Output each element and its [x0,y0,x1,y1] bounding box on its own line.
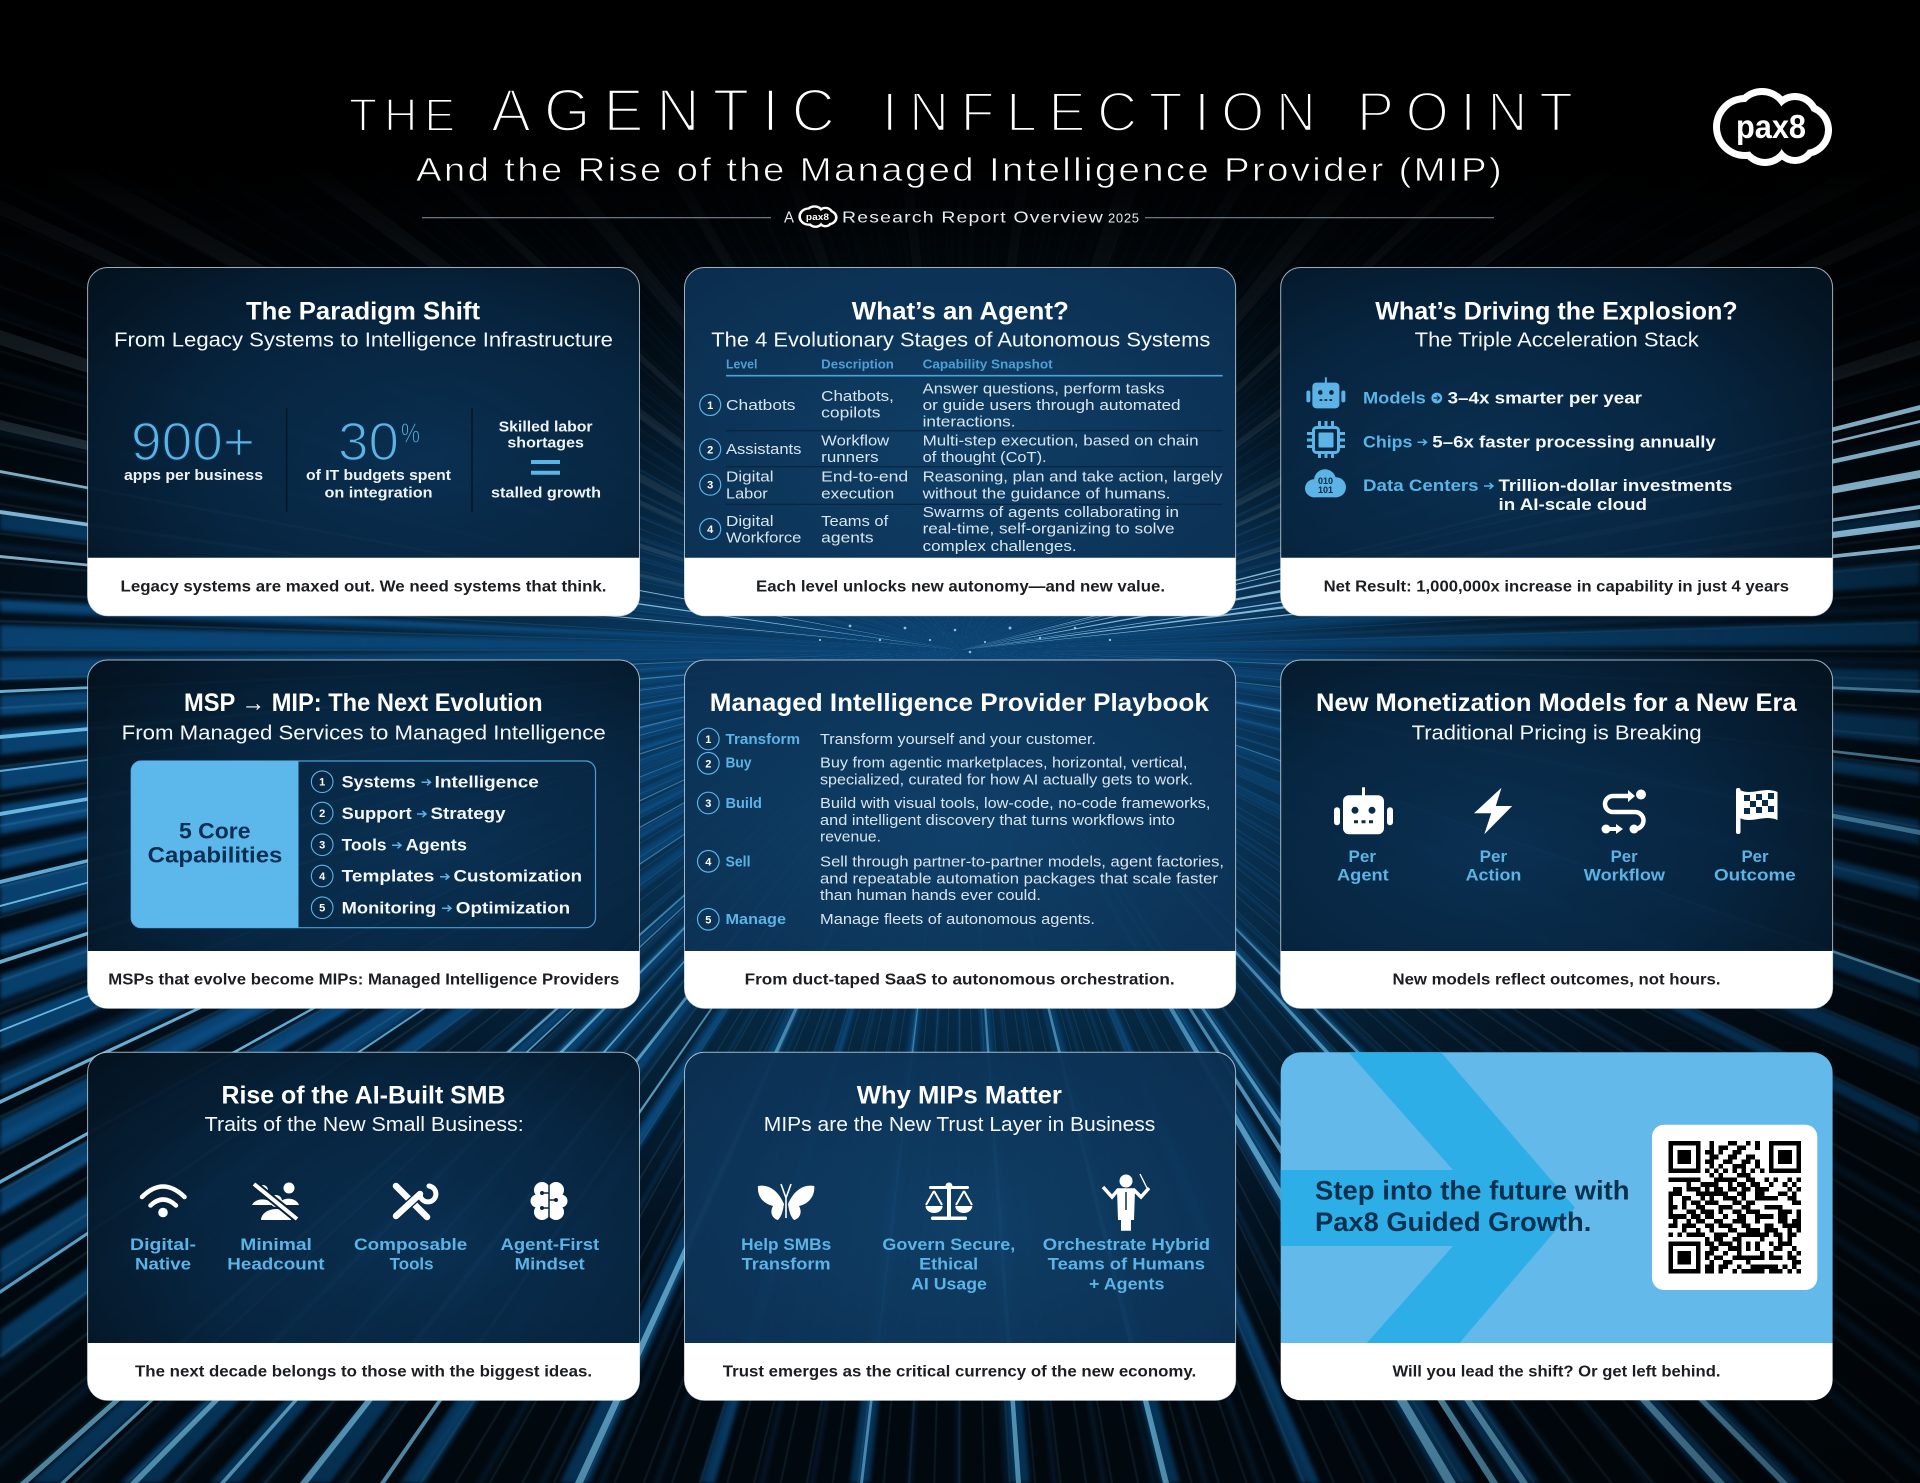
icon: conductor [1103,1174,1149,1231]
report byline: 2025 [1108,211,1139,226]
capability 1: 1 [319,777,325,789]
step: manage [698,908,1095,930]
report byline: A [784,210,794,227]
step: build [698,792,1210,846]
stat: 900+ apps: 900+ [131,412,255,472]
capability 4: 4 [319,871,326,883]
row: digital workforce: agents [821,530,874,547]
heading: MSP → MIP: The Next Evolution [184,689,543,717]
footer text: Trust emerges as the critical currency of the new economy. [723,1364,1196,1381]
subheading: The 4 Evolutionary Stages of Autonomous Systems [711,330,1210,352]
panel: why MIPs matter [684,1052,1236,1400]
reason: orchestrate hybrid teams: Orchestrate Hybrid [1043,1235,1210,1254]
row: chatbots: Answer questions, perform tasks [923,380,1165,397]
step: sell: Sell [726,854,750,871]
capability 4 [311,865,582,887]
icon: wifi [142,1186,184,1217]
panel: monetization models [1281,660,1833,1008]
model: per agent: Per [1348,847,1376,866]
row: assistants: 2 [707,444,713,456]
row: digital workforce: real-time, self-organizing to solve [923,521,1175,538]
step: transform: 1 [705,734,711,746]
row: models: 3–4x smarter per year [1448,388,1642,407]
capability 3: 3 [319,840,325,852]
trait: digital-native [130,1186,196,1273]
row: assistants: runners [821,449,879,466]
capability 2: 2 [319,808,325,820]
step: buy: Buy [726,755,752,772]
icon: brain [530,1182,568,1220]
footer text: MSPs that evolve become MIPs: Managed Intelligence Providers [108,971,619,988]
step: transform: Transform [726,731,800,748]
reason: govern secure, ethical AI usage [882,1182,1015,1293]
icon: scales [926,1182,972,1220]
heading: What’s an Agent? [852,297,1069,325]
report byline [422,205,1494,228]
heading: Rise of the AI-Built SMB [222,1081,506,1109]
row: chatbots: 1 [707,400,713,412]
footer text: Net Result: 1,000,000x increase in capability in just 4 years [1324,579,1789,596]
model: per outcome [1714,788,1796,885]
capability 3 [311,834,467,856]
subheading: Traditional Pricing is Breaking [1412,722,1702,744]
header title: THE [349,89,455,141]
model: per action [1466,788,1521,885]
model: per agent [1334,787,1393,885]
row: digital workforce: Teams of [821,513,889,530]
trait: minimal headcount: Minimal [240,1235,312,1254]
footer band [88,951,640,1008]
stat: 30% of IT budgets: of IT budgets spent [306,467,451,484]
step: build: 3 [705,798,711,810]
row: digital workforce [700,504,1179,555]
step: build: and intelligent discovery that turns workflows into [820,812,1175,829]
row: chatbots: Chatbots, [821,388,894,405]
row: assistants: Assistants [726,441,801,458]
table header: Capability Snapshot [923,357,1054,371]
table header [726,357,1223,376]
capabilities label: Capabilities [148,842,282,867]
subheading: The Triple Acceleration Stack [1415,330,1700,352]
trait: agent-first mindset: Agent-First [500,1235,600,1254]
subheading: Traits of the New Small Business: [205,1114,524,1136]
row: chips: 5–6x faster processing annually [1432,432,1716,451]
step: buy [698,752,1193,788]
heading: New Monetization Models for a New Era [1316,689,1798,717]
icon: chip [1307,421,1345,458]
step: transform [698,728,1096,750]
trait: composable tools [354,1186,467,1273]
stat: 900+ apps: apps per business [124,467,263,484]
footer text: Will you lead the shift? Or get left behind. [1392,1364,1720,1381]
trait: agent-first mindset: Mindset [515,1254,585,1273]
step: sell: Sell through partner-to-partner models, agent factories, [820,854,1224,871]
small pax8 logo [798,205,838,228]
trait: composable tools: Composable [354,1235,467,1254]
footer band [88,1343,640,1400]
footer band [1281,951,1833,1008]
row: digital workforce: 4 [707,524,714,536]
panel: what's driving the explosion [1281,268,1833,616]
step: sell: 4 [705,856,712,868]
stat: skilled labor equals stalled growth: stalled growth [491,484,601,501]
model: per workflow: Workflow [1584,866,1666,885]
row: digital labor: Labor [726,485,768,502]
capability 3: Tools [342,835,386,854]
trait: digital-native: Digital- [130,1235,196,1254]
capability 1 [311,771,539,792]
capability 4: Customization [454,867,582,886]
panel: call to action [1281,1052,1833,1400]
icon: butterfly [758,1184,814,1220]
row: chatbots: Chatbots [726,397,796,414]
icon: checkered flag [1736,788,1778,834]
trait: minimal headcount [227,1182,325,1273]
capability 5: 5 [319,903,325,915]
model: per workflow: Per [1611,847,1638,866]
row: chatbots [700,380,1181,431]
footer band [684,1343,1236,1400]
trait: minimal headcount: Headcount [227,1254,325,1273]
footer text: Legacy systems are maxed out. We need systems that think. [120,579,606,596]
header subtitle: And the Rise of the Managed Intelligence Provider (MIP) [416,151,1504,188]
row: chatbots: interactions. [923,414,1016,431]
reason: help SMBs transform: Help SMBs [741,1235,831,1254]
call to action text [1315,1175,1630,1237]
footer text: Each level unlocks new autonomy—and new value. [756,579,1165,596]
capability 1: Systems [342,772,416,791]
step: buy: specialized, curated for how AI actually gets to work. [820,771,1193,788]
step: sell [698,850,1224,904]
footer band [1281,558,1833,616]
stat: 30% of IT budgets: 30 [338,412,399,472]
small pax8 logo: pax8 [806,212,829,223]
header title [349,77,1573,144]
pax8 logo: pax8 [1736,108,1806,145]
icon: data cloud [1305,469,1346,497]
row: assistants: of thought (CoT). [923,449,1047,466]
row: digital workforce: Swarms of agents collaborating in [923,504,1179,521]
stat: skilled labor equals stalled growth: shortages [507,435,584,452]
step: buy: 2 [705,758,711,770]
step: buy: Buy from agentic marketplaces, horizontal, vertical, [820,755,1187,772]
stat: skilled labor equals stalled growth [491,419,601,501]
capability 5: Optimization [456,898,570,917]
step: build: Build [726,795,762,812]
capability 2: Support [342,804,412,823]
row: chatbots: or guide users through automated [923,397,1181,414]
reason: orchestrate hybrid teams [1043,1174,1210,1293]
footer band [684,951,1236,1008]
row: models [1363,388,1642,407]
icon: data cloud: 010 [1318,476,1333,486]
model: per outcome: Outcome [1714,866,1796,885]
step: manage: Manage [726,911,786,928]
step: transform: Transform yourself and your customer. [820,731,1096,748]
row: data centers [1363,476,1732,514]
centre sparkles [819,625,1111,653]
model: per action: Per [1480,847,1508,866]
capabilities box [131,761,595,928]
icon: wrench and screwdriver [396,1186,436,1217]
model: per workflow [1584,790,1666,885]
row: digital labor: 3 [707,480,713,492]
capability 5 [311,897,570,918]
model: per agent: Agent [1337,866,1389,885]
icon: workflow path [1602,790,1646,834]
footer text: New models reflect outcomes, not hours. [1392,971,1720,988]
stat: skilled labor equals stalled growth: Skilled labor [499,419,593,436]
call to action text: Step into the future with [1315,1175,1630,1205]
heading: Why MIPs Matter [857,1081,1062,1109]
panel: the paradigm shift [88,268,640,616]
row: assistants [700,432,1199,466]
footer band [88,558,640,616]
step: sell: than human hands ever could. [820,887,1041,904]
step: build: revenue. [820,829,881,846]
row: digital labor [700,469,1223,502]
row: digital labor: execution [821,485,894,502]
reason: help SMBs transform: Transform [742,1254,831,1273]
row: digital workforce: Workforce [726,530,801,547]
footer text: The next decade belongs to those with the biggest ideas. [135,1364,592,1381]
subheading: MIPs are the New Trust Layer in Business [764,1114,1155,1136]
subheading: From Managed Services to Managed Intelligence [122,722,606,744]
QR code [1652,1125,1817,1290]
capability 2: Strategy [430,804,506,823]
row: data centers: Trillion-dollar investments [1498,476,1732,495]
row: data centers: Data Centers [1363,476,1479,495]
step: build: Build with visual tools, low-code, no-code frameworks, [820,795,1210,812]
model: per action: Action [1466,866,1521,885]
row: chips: Chips [1363,432,1412,451]
call to action text: Pax8 Guided Growth. [1315,1207,1591,1237]
icon: robot [1306,377,1345,408]
row: data centers: in AI-scale cloud [1498,495,1647,514]
reason: govern secure, ethical AI usage: AI Usage [911,1274,987,1293]
step: manage: 5 [705,914,711,926]
model: per outcome: Per [1742,847,1769,866]
pax8 logo [1713,88,1832,166]
row: digital workforce: complex challenges. [923,538,1077,555]
report byline: Research Report Overview [842,210,1104,227]
footer band [1281,1343,1833,1400]
capability 3: Agents [406,835,467,854]
row: digital labor: Reasoning, plan and take action, largely [923,469,1223,486]
capability 1: Intelligence [435,772,539,791]
capabilities label [131,761,298,928]
row: assistants: Workflow [821,432,889,449]
arrow shape [1281,1052,1575,1343]
heading: The Paradigm Shift [246,297,481,325]
capability 5: Monitoring [342,898,436,917]
heading: Managed Intelligence Provider Playbook [710,689,1209,717]
footer band [684,558,1236,616]
capabilities label: 5 Core [179,818,250,843]
row: digital labor: Digital [726,469,774,486]
icon: crossed-out team [252,1182,299,1220]
header title: INFLECTION [882,81,1316,143]
stat: 30% of IT budgets: on integration [324,484,432,501]
icon: data cloud: 101 [1318,485,1333,495]
reason: govern secure, ethical AI usage: Govern Secure, [882,1235,1015,1254]
row: chatbots: copilots [821,405,880,422]
row: digital labor: End-to-end [821,469,908,486]
capability 2 [311,802,506,824]
reason: orchestrate hybrid teams: + Agents [1089,1274,1164,1293]
reason: orchestrate hybrid teams: Teams of Humans [1048,1254,1205,1273]
step: manage: Manage fleets of autonomous agents. [820,911,1095,928]
reason: govern secure, ethical AI usage: Ethical [919,1254,978,1273]
stat: 30% of IT budgets [306,412,451,501]
table header: Level [726,357,757,371]
footer text: From duct-taped SaaS to autonomous orchestration. [745,971,1175,988]
row: models: Models [1363,388,1426,407]
subheading: From Legacy Systems to Intelligence Infrastructure [114,330,613,352]
panel: what's an agent [684,268,1236,616]
trait: composable tools: Tools [390,1254,434,1273]
row: digital workforce: Digital [726,513,774,530]
header title: POINT [1357,81,1573,143]
panel: playbook [684,660,1236,1008]
panel: MSP to MIP [88,660,640,1008]
panel: AI-built SMB [88,1052,640,1400]
reason: help SMBs transform [741,1184,831,1273]
capability 4: Templates [342,867,434,886]
trait: digital-native: Native [135,1254,191,1273]
icon: robot [1334,787,1393,834]
heading: What’s Driving the Explosion? [1375,297,1738,325]
icon: lightning bolt [1474,788,1512,834]
trait: agent-first mindset [500,1182,600,1273]
step: sell: and repeatable automation packages that scale faster [820,870,1218,887]
row: digital labor: without the guidance of humans. [921,485,1171,502]
row: assistants: Multi-step execution, based on chain [923,432,1199,449]
header title: AGENTIC [491,77,835,144]
table header: Description [821,357,894,371]
stat: 30% of IT budgets: % [401,418,420,449]
